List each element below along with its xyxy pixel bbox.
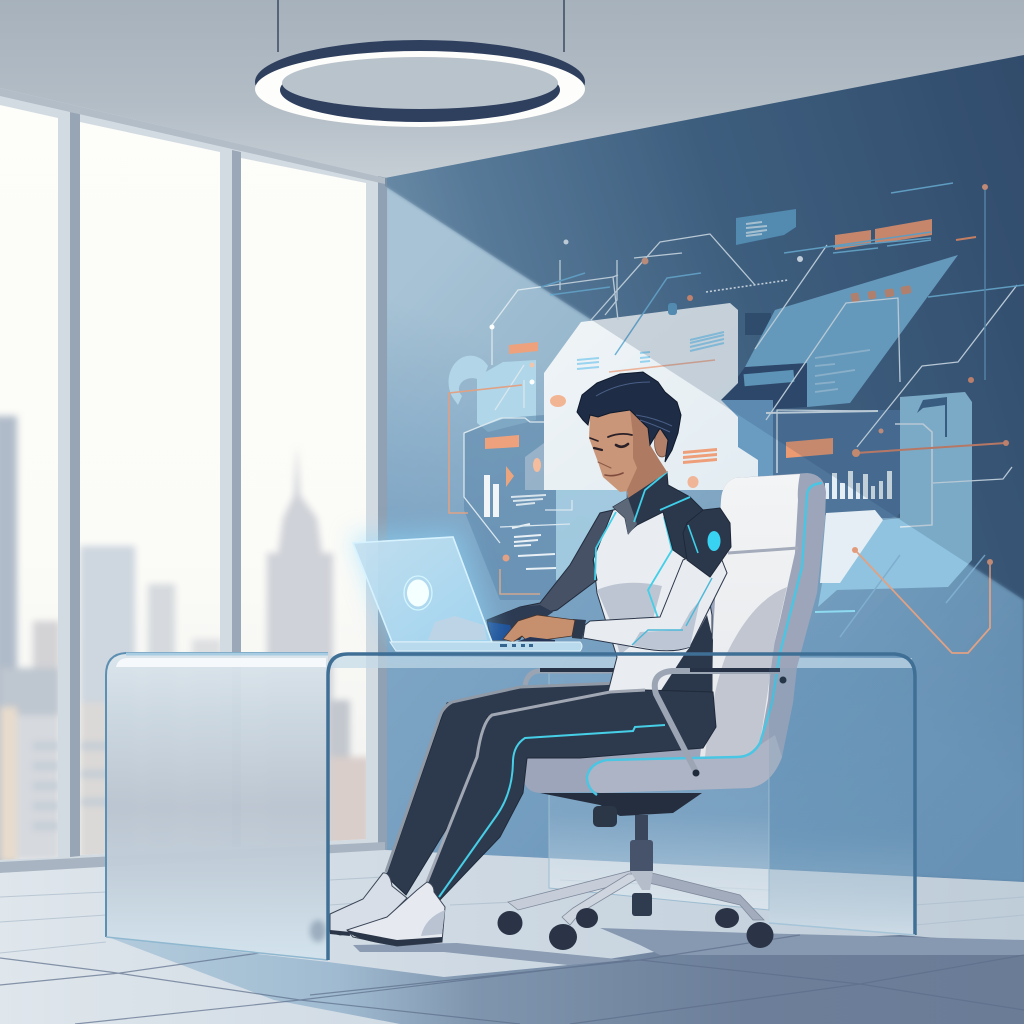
near leg (427, 690, 716, 903)
tab on right panel (917, 397, 947, 437)
small data cards and text lines (511, 209, 870, 569)
icon: crescent (448, 356, 488, 405)
seat cushion (587, 735, 782, 793)
floor (0, 850, 1024, 1024)
hair (577, 372, 681, 462)
shoe shadow through slab (310, 920, 326, 942)
light suspension wires (278, 0, 564, 52)
near armrest (655, 670, 786, 776)
seat mechanism (540, 793, 702, 816)
far armrest (525, 671, 620, 685)
torso cyan trim (595, 512, 672, 618)
circuit lines (449, 183, 1024, 653)
slab top highlight (116, 658, 326, 667)
chair cyan trim (587, 483, 822, 795)
bar chart: right (825, 471, 892, 499)
shoulder light (708, 531, 720, 551)
blue sleeve at laptop (488, 622, 515, 640)
panel: mid blue block (721, 400, 773, 505)
desktop surface sheen (330, 656, 912, 668)
glass front edge (328, 654, 915, 960)
right glass slab (769, 668, 914, 935)
chair base (508, 815, 764, 925)
window panes and blurred skyline (0, 90, 385, 870)
front glass desk (328, 654, 915, 960)
panel: lower right pale card (820, 510, 883, 583)
panel: dark data backing (773, 410, 902, 518)
dark far arm (487, 510, 613, 640)
ear (654, 429, 670, 457)
shoe and caster shadows (353, 943, 627, 965)
facial features (590, 434, 632, 476)
window wall with frames (0, 88, 387, 873)
keyboard hand dark shadow (516, 637, 555, 645)
back wall (385, 55, 1024, 882)
far glass slab (549, 668, 769, 910)
lower torso dark side (660, 615, 713, 695)
panel: left dark region (464, 415, 556, 600)
far leg (386, 683, 640, 895)
far shoe (330, 873, 407, 935)
laptop glow (350, 530, 495, 645)
wrist cuff (572, 619, 586, 639)
panel: tilted parallelogram (745, 255, 958, 407)
near shoe (347, 882, 445, 946)
torso (593, 500, 712, 700)
floor shadow (108, 935, 1024, 1024)
laptop keys (500, 644, 533, 647)
panel: left small light blue (477, 360, 536, 432)
person (330, 372, 731, 946)
laptop hidden hand (428, 616, 487, 640)
left frosted slab (106, 654, 328, 960)
chair casters (498, 908, 774, 950)
panel: upper mid dark backing (721, 363, 807, 410)
laptop screen (353, 537, 492, 642)
panel: large pale cloud (525, 303, 758, 490)
panel: lower left blue column (556, 490, 626, 580)
face and neck (589, 410, 667, 498)
chair back and seat shell (523, 473, 826, 793)
collar cyan trim (634, 472, 690, 522)
panel: right light blue (818, 392, 972, 607)
laptop base (390, 642, 582, 651)
wall infographic hologram (385, 55, 1024, 653)
bar chart: left (484, 475, 499, 517)
near arm sleeve (583, 545, 727, 651)
shoulder pad (683, 508, 731, 577)
chair back shading (705, 587, 787, 757)
office chair (498, 473, 826, 950)
laptop with holographic glow (350, 530, 582, 651)
circuit nodes (490, 184, 1009, 565)
neck collar and chest yoke (613, 472, 703, 560)
near leg cyan seam (439, 725, 665, 897)
orange labels (485, 219, 932, 488)
near hand (503, 615, 575, 642)
ceiling (0, 0, 1024, 178)
face shadow side (627, 410, 667, 498)
frosted glass desk, rear panels (106, 653, 912, 960)
sunlight shadow edge over panels (385, 55, 1024, 600)
laptop glowing logo (404, 576, 432, 610)
pendant ring light (255, 0, 585, 127)
